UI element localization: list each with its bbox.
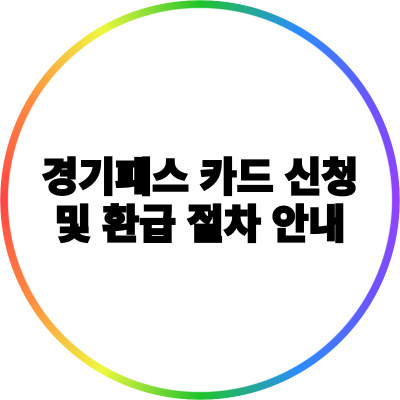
title line 2: 및 환급 절차 안내 — [55, 203, 345, 247]
title line 1: 경기패스 카드 신청 — [42, 156, 358, 200]
